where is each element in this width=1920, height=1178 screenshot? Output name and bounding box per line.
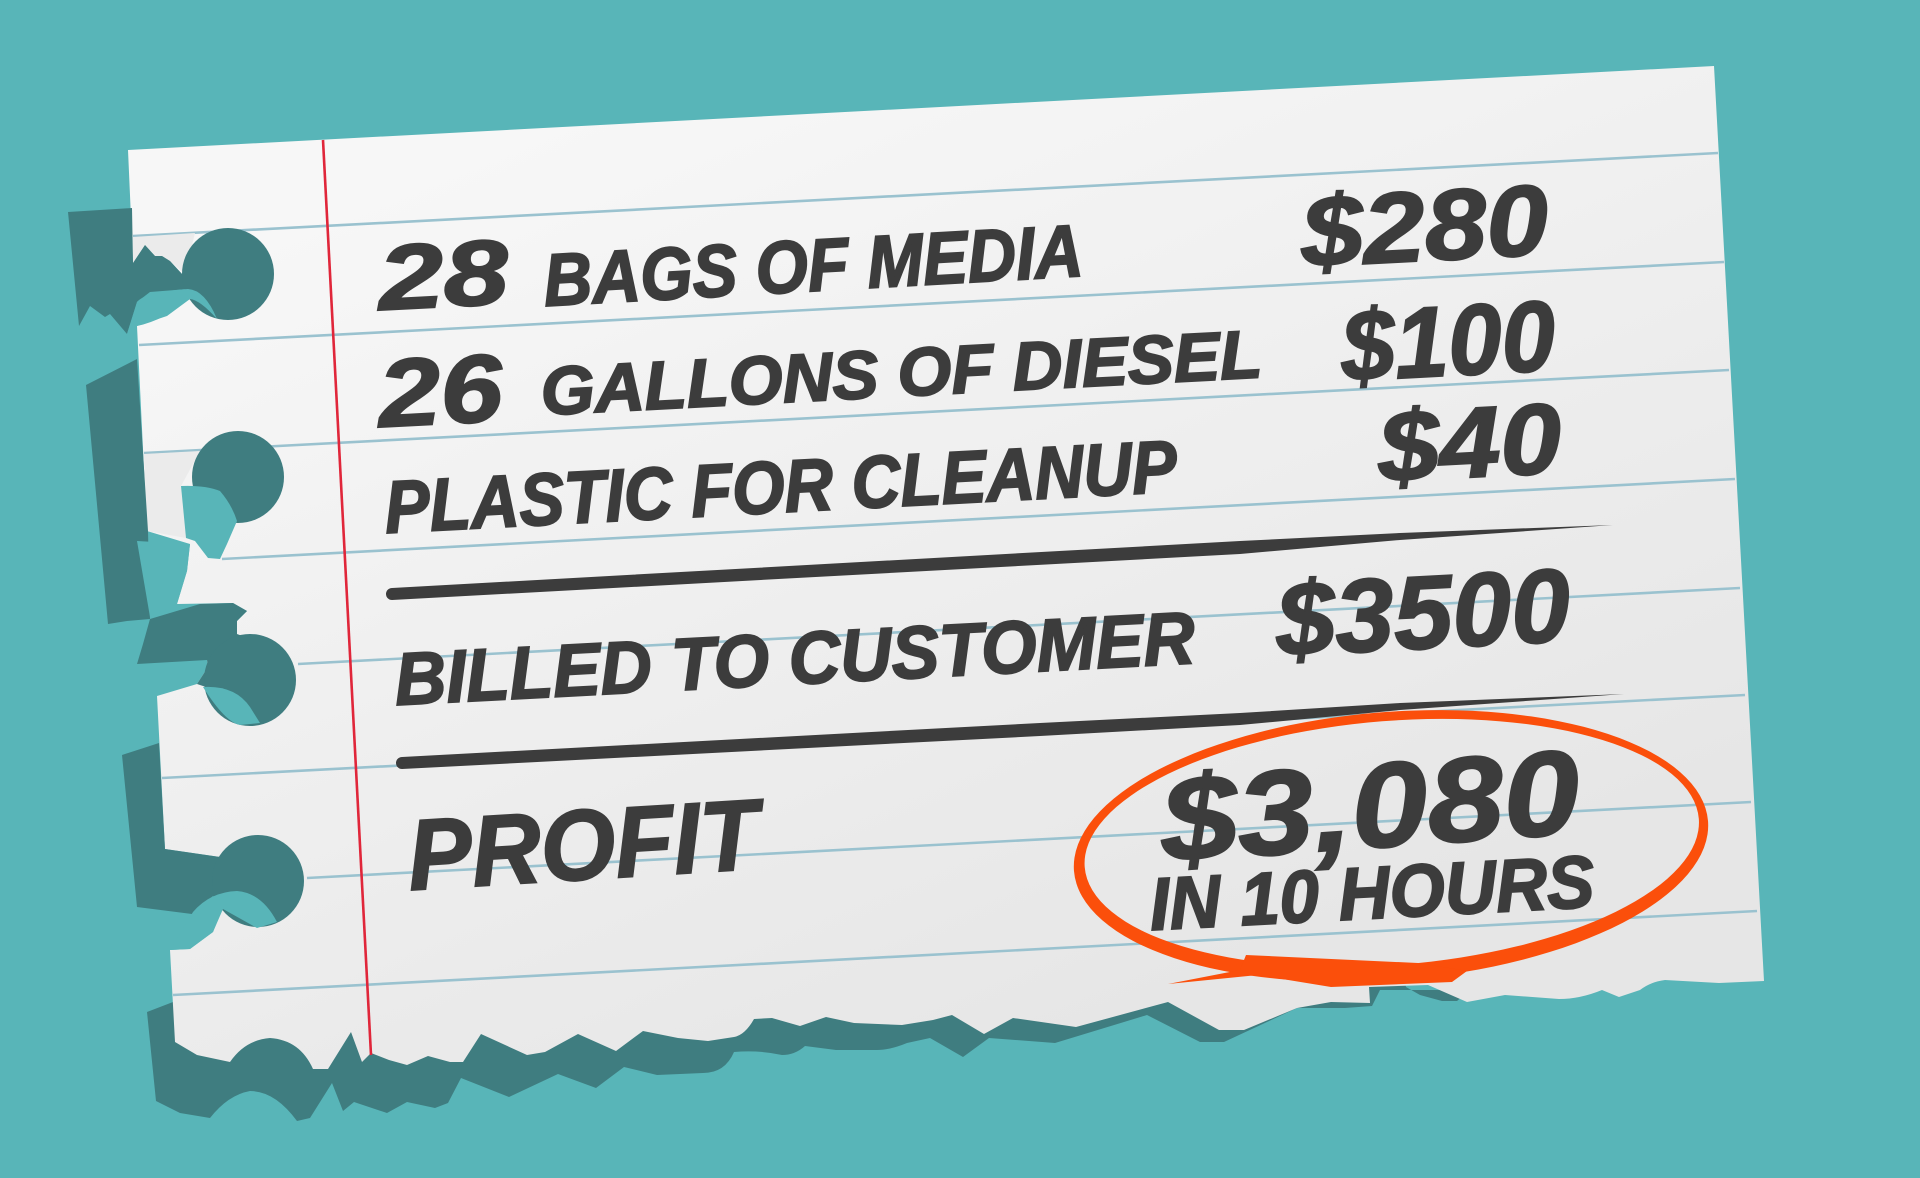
row: 26 gallons of diesel (373, 316, 1264, 448)
hole 4 (212, 835, 304, 927)
teal crescent in hole 4 (170, 891, 277, 950)
row: profit: PROFIT (405, 778, 769, 912)
hole 3 (204, 634, 296, 726)
row: 28 bags of media: 28 (373, 221, 512, 330)
torn flap shading (133, 233, 200, 538)
paper sheet (128, 66, 1764, 1069)
divider stroke 1 (386, 525, 1613, 600)
teal gap under hole 1 (127, 289, 217, 334)
amount: $40: $40 (1374, 383, 1564, 504)
profit amount: $3,080: $3,080 (1155, 725, 1584, 888)
hole 1 (182, 228, 274, 320)
teal crescent in hole 3 (203, 687, 260, 725)
amount: $280: $280 (1297, 164, 1551, 289)
amount: $3500: $3500 (1272, 548, 1573, 679)
row: billed to customer: BILLED TO CUSTOMER (392, 596, 1197, 721)
row: 28 bags of media (373, 209, 1085, 330)
punched holes and torn left edge (68, 208, 304, 950)
teal flap between holes (137, 541, 190, 617)
ruled blue lines (133, 153, 1757, 995)
hole 2 (192, 431, 284, 523)
divider stroke 2 (396, 694, 1624, 769)
row: 28 bags of media: BAGS OF MEDIA (541, 209, 1085, 322)
caption: in 10 hours: IN 10 HOURS (1147, 840, 1596, 946)
row: 26 gallons of diesel: GALLONS OF DIESEL (539, 316, 1264, 430)
shadow: third tear band (137, 603, 280, 720)
shadow: second tear (86, 359, 150, 624)
amount: $100: $100 (1337, 280, 1558, 403)
row: 26 gallons of diesel: 26 (373, 335, 506, 448)
row: plastic for cleanup: PLASTIC FOR CLEANUP (382, 425, 1179, 549)
shadow: top-left tear (68, 208, 215, 334)
orange hand-drawn circle (1063, 687, 1719, 1005)
shadow: fourth tear band (122, 743, 270, 914)
red margin line (323, 140, 371, 1055)
paper shadow: bottom edge (147, 960, 1470, 1121)
teal piece in hole 2 (181, 486, 237, 559)
